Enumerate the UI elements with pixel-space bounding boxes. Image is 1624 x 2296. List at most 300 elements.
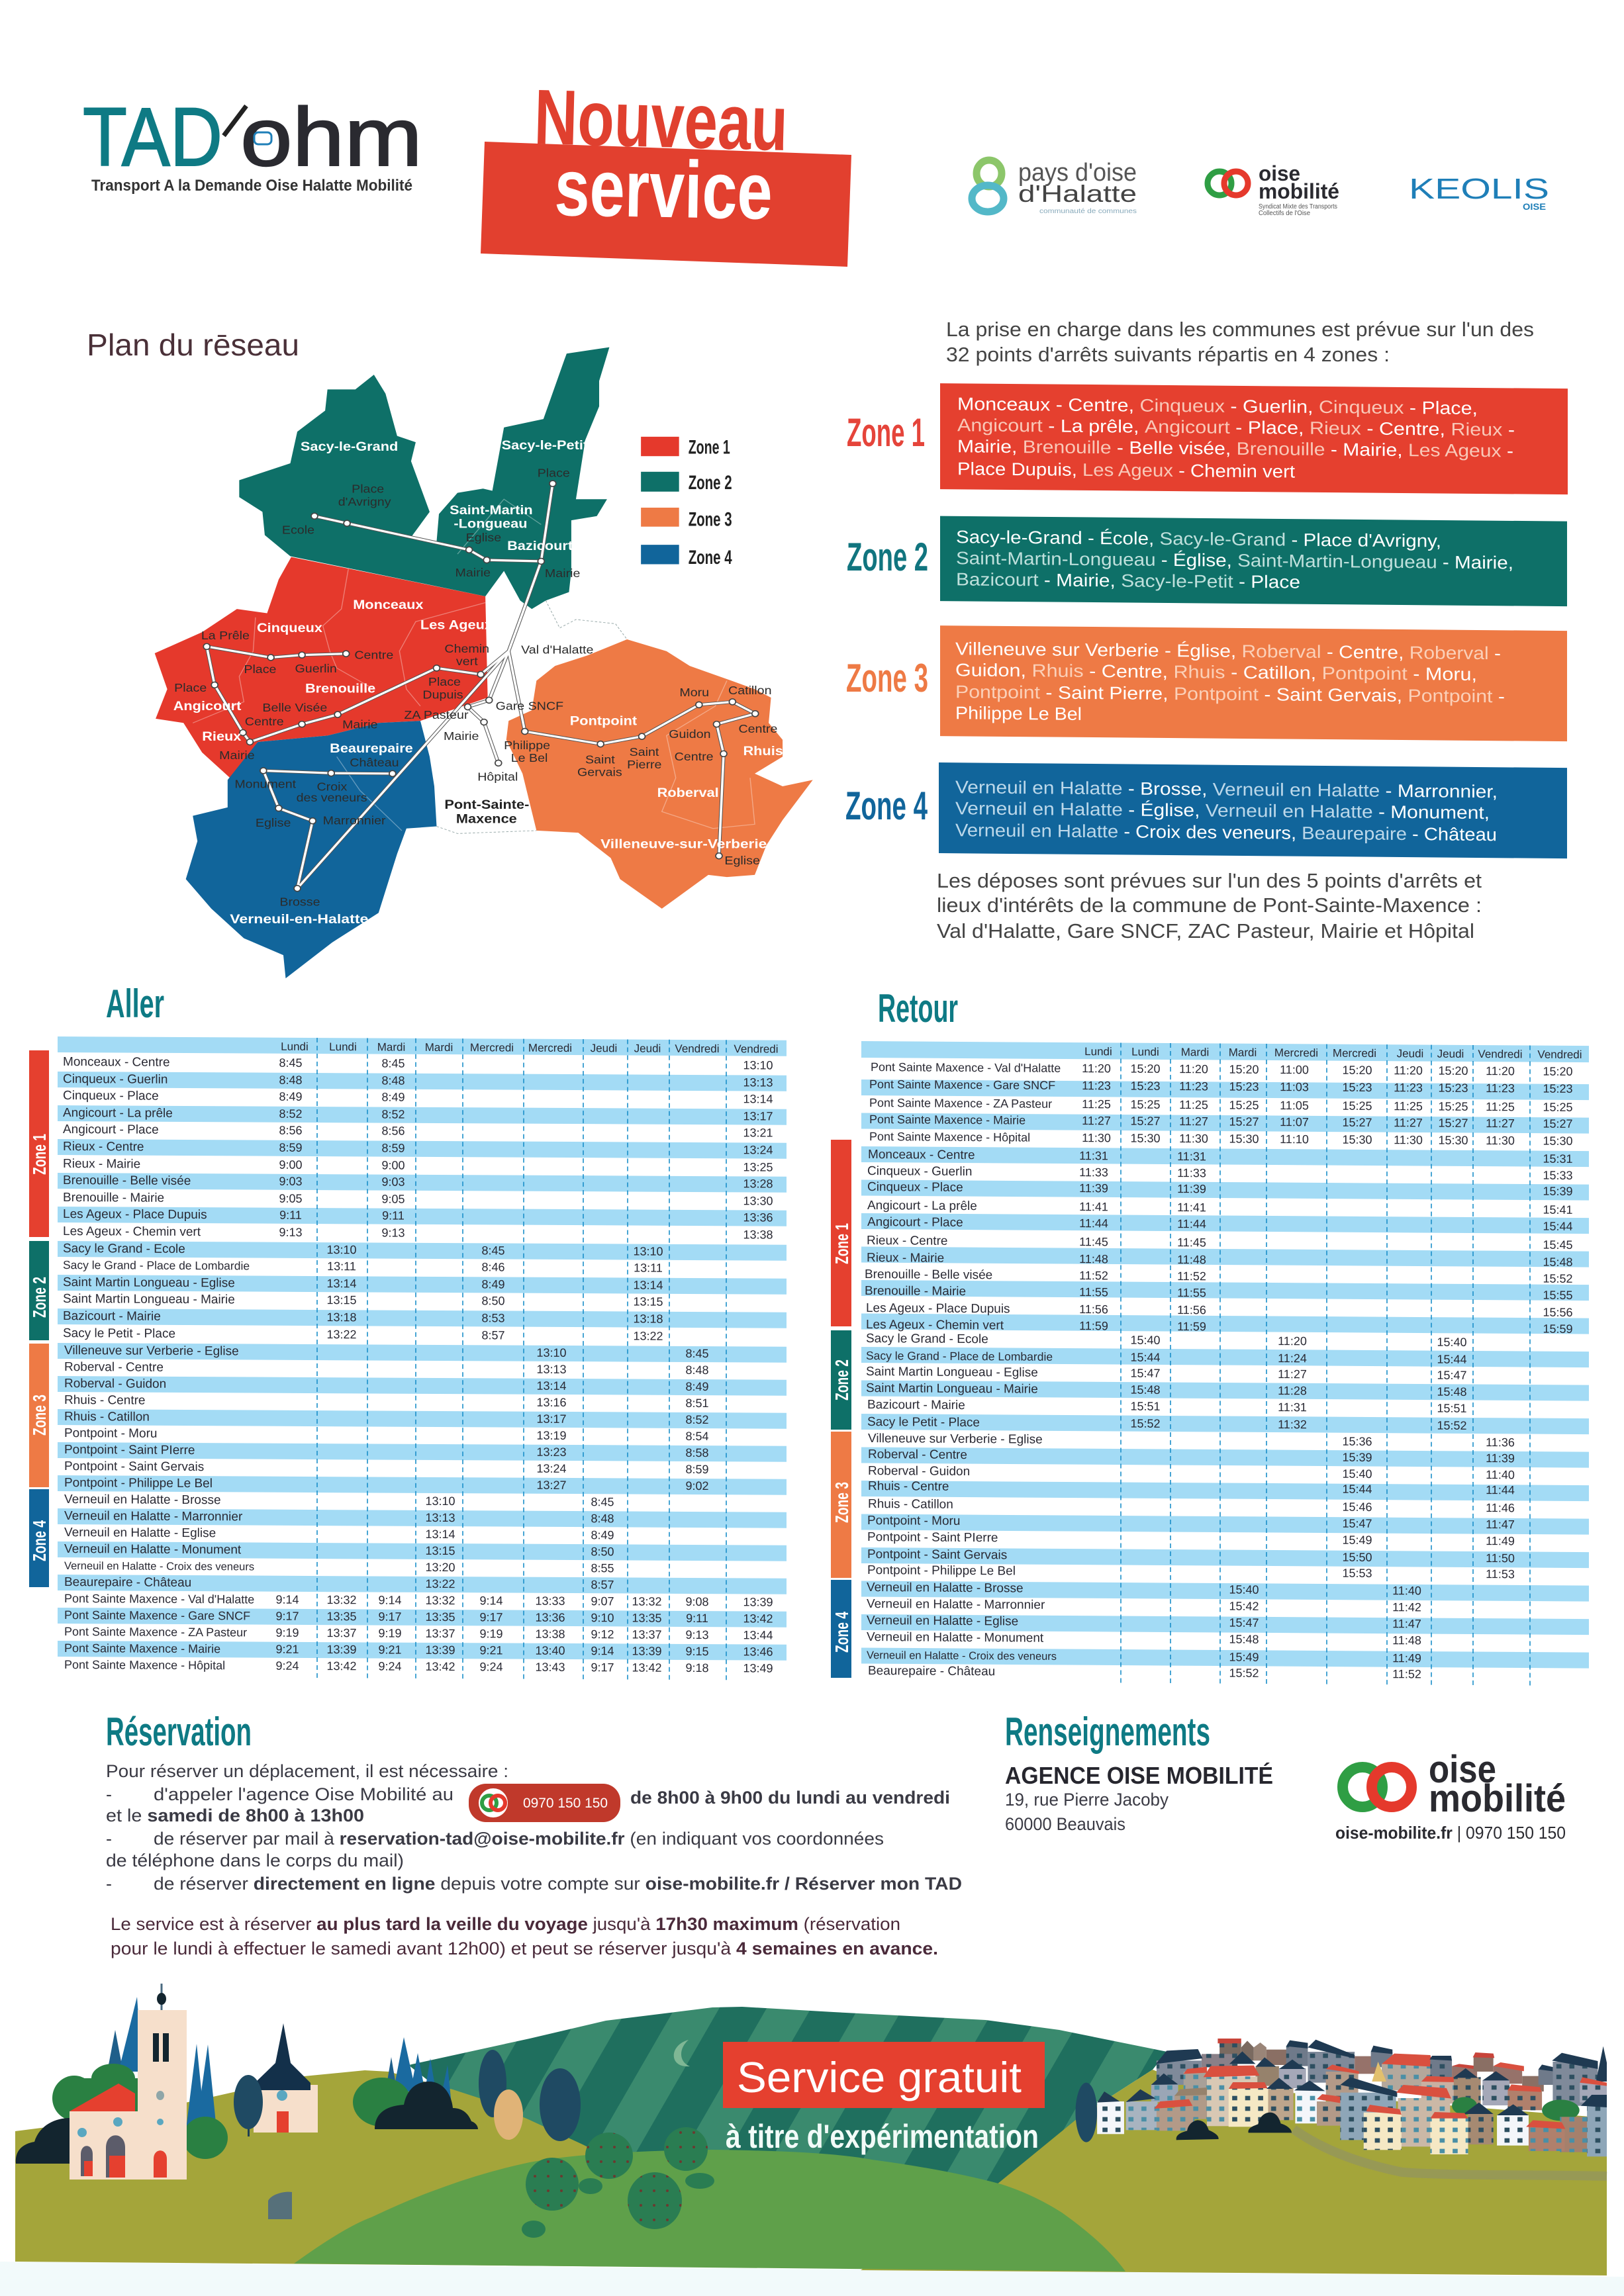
panel: zone 2 stops: Bazicourt - Mairie, Sacy-le-Petit - Place: [956, 569, 1300, 592]
row: Rieux - Centre: 8:59: [279, 1141, 303, 1154]
day headers: [1084, 1045, 1582, 1061]
row: Verneuil en Halatte - Eglise: Verneuil en Halatte - Eglise: [64, 1526, 216, 1540]
row: Pont Sainte Maxence - Gare SNCF: 11:23: [1394, 1081, 1423, 1095]
row: Saint Martin Longueau - Eglise: Saint Martin Longueau - Eglise: [866, 1365, 1038, 1380]
row: Les Ageux - Place Dupuis: 11:56: [1177, 1303, 1206, 1316]
row: Les Ageux - Chemin vert: 11:59: [1177, 1320, 1206, 1333]
day headers: Mercredi: [470, 1041, 514, 1054]
row: Roberval - Guidon: Roberval - Guidon: [868, 1464, 970, 1479]
row: Pont Sainte Maxence - ZA Pasteur: 11:25: [1179, 1098, 1208, 1111]
row: Pontpoint - Philippe Le Bel: Pontpoint - Philippe Le Bel: [867, 1563, 1016, 1579]
row: Angicourt - La prêle: 13:17: [743, 1109, 773, 1123]
panel: zone 3 stops: [940, 625, 1567, 741]
text: agency address: 60000 Beauvais: [1005, 1814, 1125, 1834]
text: agency address: [1005, 1762, 1273, 1834]
row: Pont Sainte Maxence - Val d'Halatte: 13:33: [535, 1594, 565, 1608]
row: Les Ageux - Place Dupuis: 9:11: [382, 1209, 405, 1222]
legend: [641, 436, 732, 568]
row: Angicourt - La prêle: Angicourt - La prêle: [63, 1106, 173, 1121]
row: Pont Sainte Maxence - Hôpital: 11:30: [1486, 1134, 1515, 1147]
row: Pont Sainte Maxence - Gare SNCF: 13:42: [743, 1612, 773, 1626]
back hill with stripes: [408, 2007, 1167, 2197]
row: Pont Sainte Maxence - Val d'Halatte: 15:20: [1130, 1062, 1161, 1076]
row: Verneuil en Halatte - Croix des veneurs: Verneuil en Halatte - Croix des veneurs: [64, 1560, 254, 1573]
row: Roberval - Centre: 13:13: [536, 1363, 567, 1376]
row: Pont Sainte Maxence - Hôpital: 11:30: [1394, 1133, 1423, 1147]
logo: Keolis: [1409, 173, 1549, 212]
row: Saint Martin Longueau - Mairie: 8:50: [481, 1294, 505, 1308]
day headers: Jeudi: [1397, 1047, 1423, 1060]
church and tree cluster: [16, 1984, 228, 2180]
commune names: -Longueau: [454, 516, 527, 531]
row: Sacy le Grand - Place de Lombardie: 13:11: [634, 1262, 663, 1275]
row: Pont Sainte Maxence - Gare SNCF: 9:10: [591, 1611, 614, 1624]
stop names: Gervais: [577, 765, 622, 778]
tagline: Transport A la Demande Oise Halatte Mobilité: [91, 177, 412, 195]
row: Pont Sainte Maxence - Gare SNCF: Pont Sainte Maxence - Gare SNCF: [64, 1608, 250, 1623]
commune names: Brenouille: [305, 681, 375, 696]
row: Villeneuve sur Verberie - Eglise: 15:36: [1342, 1435, 1372, 1448]
row: Verneuil en Halatte - Croix des veneurs: 11:49: [1392, 1651, 1421, 1665]
row: Cinqueux - Guerlin: 11:33: [1079, 1166, 1108, 1179]
row: Pont Sainte Maxence - Mairie: 13:39: [632, 1645, 662, 1658]
day headers: Mercredi: [1274, 1046, 1318, 1059]
row: Sacy le Petit - Place: 15:52: [1130, 1417, 1161, 1430]
row: Saint Martin Longueau - Eglise: Saint Martin Longueau - Eglise: [63, 1275, 235, 1290]
row: Pont Sainte Maxence - Hôpital: 11:30: [1082, 1131, 1111, 1144]
row: Verneuil en Halatte - Marronnier: 8:48: [591, 1512, 614, 1525]
row: Pont Sainte Maxence - Hôpital: 15:30: [1543, 1134, 1573, 1148]
row: Pontpoint - Philippe Le Bel: 15:53: [1342, 1567, 1372, 1580]
row: Pont Sainte Maxence - Val d'Halatte: 11:00: [1280, 1063, 1309, 1076]
row: Pontpoint - Moru: 11:47: [1486, 1518, 1515, 1531]
row: Pontpoint - Saint Gervais: 11:50: [1486, 1551, 1515, 1565]
row: Rieux - Mairie: Rieux - Mairie: [63, 1157, 140, 1171]
row: Verneuil en Halatte - Eglise: 13:14: [425, 1528, 455, 1541]
logo: TAD'ohm: ohm: [240, 91, 422, 183]
zone bars: Retour: [831, 1140, 852, 1678]
row: Saint Martin Longueau - Eglise: 13:14: [633, 1279, 663, 1292]
row: Verneuil en Halatte - Brosse: Verneuil en Halatte - Brosse: [64, 1492, 221, 1507]
stop names: Eglise: [256, 816, 291, 829]
row: Beaurepaire - Château: 8:57: [591, 1578, 614, 1591]
panel: zone 4 stops: Verneuil en Halatte - Église, Verneuil en Halatte - Monument,: [955, 798, 1490, 823]
stop names: Centre: [675, 750, 714, 763]
row: Pontpoint - Saint Pierre: Pontpoint - Saint PIerre: [64, 1443, 195, 1457]
day headers: Lundi: [281, 1040, 309, 1053]
day headers: Vendredi: [675, 1042, 720, 1055]
row: Pontpoint - Moru: 15:47: [1342, 1517, 1372, 1530]
heading: Zone 4: Zone 4: [845, 784, 928, 828]
row: Pont Sainte Maxence - Val d'Halatte: 13:32: [632, 1595, 662, 1608]
row: Pont Sainte Maxence - Gare SNCF: 13:35: [632, 1612, 662, 1625]
row: Pont Sainte Maxence - Hôpital: 15:30: [1130, 1132, 1161, 1145]
stop names: Place: [174, 681, 207, 694]
stop names: Croix: [316, 780, 348, 793]
row: Pont Sainte Maxence - ZA Pasteur: 11:25: [1394, 1099, 1423, 1113]
row: Pont Sainte Maxence - Hôpital: 15:30: [1342, 1133, 1372, 1146]
stop names: Mairie: [342, 717, 378, 731]
zone bars: Aller: Zone 4: [29, 1520, 50, 1561]
row: Brenouille - Mairie: 9:05: [381, 1193, 405, 1206]
text: reservation instructions: Pour réserver un déplacement, il est nécessaire :: [106, 1761, 508, 1781]
road: [1294, 2129, 1607, 2176]
row: Sacy le Petit - Place: 13:22: [633, 1330, 663, 1343]
row: Les Ageux - Place Dupuis: 9:11: [279, 1209, 302, 1222]
bus routes: [207, 484, 755, 888]
row: Pont Sainte Maxence - Val d'Halatte: 11:20: [1486, 1064, 1515, 1078]
day headers: Vendredi: [1478, 1048, 1523, 1060]
logo: pays d'oise et d'Halatte: pays d'oise: [1018, 159, 1137, 187]
row: Verneuil en Halatte - Monument: 15:48: [1229, 1633, 1259, 1646]
stop names: Ecole: [282, 523, 314, 536]
row: Pontpoint - Saint Pierre: 15:49: [1342, 1534, 1372, 1547]
row: Rhuis - Centre: Rhuis - Centre: [64, 1393, 145, 1408]
row: Pont Sainte Maxence - Val d'Halatte: Pont Sainte Maxence - Val d'Halatte: [871, 1060, 1061, 1075]
row: Sacy le Grand - Place de Lombardie: 13:11: [327, 1260, 356, 1273]
row: Saint Martin Longueau - Mairie: 13:15: [633, 1295, 663, 1309]
day headers: Lundi: [1084, 1045, 1112, 1058]
row: Pontpoint - Philippe Le Bel: Pontpoint - Philippe Le Bel: [64, 1476, 213, 1491]
row: Verneuil en Halatte - Eglise: 11:47: [1392, 1617, 1421, 1630]
text: agency address: 19, rue Pierre Jacoby: [1005, 1790, 1169, 1810]
row: Brenouille - Belle visée: Brenouille - Belle visée: [63, 1173, 191, 1188]
row: Pont Sainte Maxence - Mairie: 15:27: [1229, 1115, 1259, 1128]
row: Pontpoint - Saint Pierre: 8:58: [685, 1446, 709, 1459]
row: Pont Sainte Maxence - Val d'Halatte: 9:14: [378, 1594, 402, 1607]
row: Rhuis - Catillon: 11:46: [1486, 1501, 1515, 1514]
row: Rhuis - Catillon: 15:46: [1342, 1500, 1372, 1514]
row: Cinqueux - Guerlin: 8:48: [381, 1074, 405, 1087]
row: Rieux - Mairie: 11:48: [1177, 1253, 1206, 1266]
commune names: Les Ageux: [420, 618, 493, 632]
row: Pont Sainte Maxence - Val d'Halatte: Pont Sainte Maxence - Val d'Halatte: [64, 1592, 254, 1606]
row: Rhuis - Catillon: 8:52: [685, 1413, 709, 1426]
row: Rieux - Mairie: 11:48: [1079, 1252, 1108, 1265]
row: Bazicourt - Mairie: 13:18: [633, 1312, 663, 1326]
row: Les Ageux - Chemin vert: 13:38: [743, 1228, 773, 1242]
row: Verneuil en Halatte - Croix des veneurs: 8:55: [591, 1561, 614, 1575]
row: Les Ageux - Place Dupuis: 13:36: [743, 1211, 773, 1224]
legend: Zone 2: [689, 471, 732, 494]
row: Les Ageux - Place Dupuis: Les Ageux - Place Dupuis: [866, 1301, 1010, 1316]
row: Pont Sainte Maxence - Mairie: 11:27: [1486, 1117, 1515, 1130]
stop names: Mairie: [545, 567, 580, 580]
logo: oise mobilité: Collectifs de l'Oise: [1259, 210, 1310, 217]
title: Nouveau service banner: [481, 73, 851, 267]
row: Monceaux - Centre: 8:45: [279, 1056, 303, 1070]
row: Pont Sainte Maxence - Mairie: 13:40: [535, 1644, 565, 1657]
row bands: [58, 1036, 787, 1661]
legend: Zone 1: [689, 436, 730, 458]
row: Pont Sainte Maxence - ZA Pasteur: 13:37: [425, 1627, 455, 1640]
day headers: Lundi: [1131, 1046, 1159, 1058]
row: Pontpoint - Saint Gervais: 15:50: [1342, 1551, 1372, 1564]
day headers: Vendredi: [734, 1042, 779, 1056]
zone bars: Retour: Zone 1: [832, 1223, 852, 1264]
row: Angicourt - La prêle: 8:52: [381, 1108, 405, 1121]
row: Pont Sainte Maxence - ZA Pasteur: 15:25: [1229, 1099, 1259, 1112]
text: reservation instructions: -: [106, 1784, 112, 1804]
row: Cinqueux - Guerlin: 11:33: [1177, 1166, 1206, 1179]
row: Pont Sainte Maxence - ZA Pasteur: 11:25: [1082, 1097, 1111, 1111]
row: Roberval - Guidon: 11:40: [1486, 1468, 1515, 1481]
text: reservation instructions: de réserver directement en ligne depuis votre compte sur oise-mobilite.fr / Réserver mon TAD: [154, 1874, 962, 1894]
text: booking deadline: [111, 1914, 938, 1958]
heading: Zone 3: Zone 3: [846, 656, 928, 700]
row: Verneuil en Halatte - Brosse: 13:10: [425, 1494, 455, 1508]
logo: pays d'oise et d'Halatte: communauté de communes: [1039, 208, 1137, 215]
route stops: [203, 481, 759, 892]
row: Angicourt - Place: Angicourt - Place: [63, 1123, 159, 1137]
row: Pont Sainte Maxence - Gare SNCF: 9:17: [378, 1610, 402, 1624]
row: Les Ageux - Place Dupuis: 15:56: [1543, 1306, 1573, 1319]
phone pill: 0970 150 150: [523, 1796, 608, 1811]
row: Pont Sainte Maxence - Gare SNCF: 9:11: [686, 1612, 708, 1625]
stop names: Place: [244, 663, 276, 676]
row: Pont Sainte Maxence - Val d'Halatte: 9:14: [275, 1593, 299, 1606]
row: Angicourt - La prêle: 15:41: [1543, 1203, 1573, 1217]
text: agency address: AGENCE OISE MOBILITÉ: [1005, 1762, 1273, 1789]
row: Sacy le Petit - Place: 13:22: [326, 1328, 357, 1341]
row: Pont Sainte Maxence - Mairie: Pont Sainte Maxence - Mairie: [64, 1641, 220, 1655]
stop names: Val d'Halatte: [521, 643, 593, 656]
row: Rhuis - Centre: 8:51: [685, 1397, 709, 1410]
row: Angicourt - La prêle: 11:41: [1177, 1201, 1206, 1214]
row: Pont Sainte Maxence - Val d'Halatte: 9:07: [591, 1594, 614, 1608]
row: Roberval - Guidon: 13:14: [536, 1379, 567, 1393]
experimental trial caption: à titre d'expérimentation: [726, 2118, 1039, 2155]
zone bars: Aller: Zone 3: [29, 1395, 50, 1436]
row: Brenouille - Belle visée: Brenouille - Belle visée: [865, 1267, 992, 1282]
commune names: Rhuis: [743, 744, 783, 758]
text: reservation instructions: et le samedi de 8h00 à 13h00: [106, 1806, 364, 1825]
middle row houses: [1184, 2051, 1607, 2110]
text: booking deadline: pour le lundi à effectuer le samedi avant 12h00) et peut se réserver jusqu'à 4 semaines en avance.: [111, 1939, 938, 1958]
row: Pont Sainte Maxence - Mairie: 11:27: [1394, 1116, 1423, 1130]
row: Angicourt - La prêle: 11:41: [1079, 1200, 1108, 1213]
logo: pays d'oise et d'Halatte: d'Halatte: [1018, 180, 1137, 207]
row: Rieux - Mairie: 9:00: [381, 1159, 405, 1172]
row: Pont Sainte Maxence - ZA Pasteur: 13:44: [743, 1628, 773, 1642]
row: Beaurepaire - Château: Beaurepaire - Château: [868, 1664, 995, 1678]
stop names: Centre: [245, 715, 284, 728]
row: Verneuil en Halatte - Monument: Verneuil en Halatte - Monument: [64, 1542, 242, 1557]
row: Pont Sainte Maxence - Gare SNCF: 15:23: [1130, 1079, 1161, 1093]
day headers: Vendredi: [1537, 1048, 1582, 1061]
stop names: Le Bel: [511, 751, 548, 764]
text: reservation instructions: de téléphone dans le corps du mail): [106, 1851, 404, 1870]
row: Pont Sainte Maxence - ZA Pasteur: 9:13: [685, 1628, 709, 1641]
row: Verneuil en Halatte - Monument: 13:15: [425, 1544, 455, 1557]
commune names: Pont-Sainte-: [444, 798, 529, 812]
row: Cinqueux - Place: 11:39: [1177, 1182, 1206, 1195]
row: Brenouille - Belle visée: 13:28: [743, 1177, 773, 1191]
front green hill: [294, 2150, 1125, 2272]
row: Pont Sainte Maxence - ZA Pasteur: 9:12: [591, 1628, 614, 1641]
row: Rhuis - Centre: Rhuis - Centre: [868, 1479, 949, 1494]
logo: pays d'oise et d'Halatte: [972, 159, 1137, 215]
row: Beaurepaire - Château: Beaurepaire - Château: [64, 1575, 191, 1590]
table: Retour timetable: [861, 1041, 1589, 1689]
row: Rieux - Mairie: 9:00: [279, 1158, 303, 1171]
row: Verneuil en Halatte - Brosse: 15:40: [1229, 1583, 1259, 1596]
stop names: Gare SNCF: [496, 699, 563, 712]
commune names: Sacy-le-Petit: [502, 438, 588, 453]
row: Bazicourt - Mairie: 11:31: [1278, 1401, 1307, 1414]
row: Pont Sainte Maxence - Gare SNCF: 13:35: [425, 1610, 455, 1624]
row: Sacy le Petit - Place: Sacy le Petit - Place: [867, 1415, 980, 1430]
row: Pont Sainte Maxence - Mairie: 11:27: [1082, 1114, 1111, 1127]
zone bars: Retour: Zone 2: [832, 1359, 852, 1401]
panel: zone 4 stops: Verneuil en Halatte - Croix des veneurs, Beaurepaire - Château: [955, 820, 1497, 845]
row: Cinqueux - Place: 8:49: [381, 1091, 405, 1104]
row: Rieux - Centre: 11:45: [1177, 1236, 1206, 1249]
row: Pont Sainte Maxence - Val d'Halatte: 15:20: [1229, 1063, 1259, 1076]
row: Verneuil en Halatte - Eglise: 15:47: [1229, 1616, 1259, 1630]
row: Angicourt - Place: 11:44: [1079, 1217, 1108, 1230]
row: Rieux - Centre: 13:24: [743, 1143, 773, 1157]
stop names: Saint: [585, 753, 616, 766]
row: Pont Sainte Maxence - Val d'Halatte: 13:39: [743, 1595, 773, 1609]
logo: oise mobilité: Syndicat Mixte des Transports: [1259, 203, 1337, 210]
commune names: Beaurepaire: [330, 741, 413, 756]
panel: zone 4 stops: [939, 762, 1567, 858]
row: Les Ageux - Place Dupuis: 11:56: [1079, 1303, 1108, 1316]
row: Sacy le Grand - Place de Lombardie: 8:46: [481, 1260, 505, 1274]
stop names: Philippe: [504, 739, 550, 752]
row: Saint Martin Longueau - Mairie: Saint Martin Longueau - Mairie: [866, 1381, 1038, 1397]
stop names: Mairie: [444, 729, 479, 743]
row: Pont Sainte Maxence - Hôpital: 15:30: [1229, 1132, 1259, 1146]
heading: Aller: Aller: [106, 982, 164, 1026]
row: Saint Martin Longueau - Mairie: Saint Martin Longueau - Mairie: [63, 1292, 235, 1307]
row: Pont Sainte Maxence - Mairie: 9:14: [591, 1644, 614, 1657]
row: Cinqueux - Place: 13:14: [743, 1092, 773, 1106]
row: Beaurepaire - Château: 11:52: [1392, 1667, 1421, 1680]
row: Pont Sainte Maxence - Gare SNCF: 15:23: [1229, 1080, 1259, 1093]
row: Pont Sainte Maxence - Val d'Halatte: 9:08: [685, 1595, 709, 1608]
row: Sacy le Grand - Ecole: 8:45: [481, 1244, 505, 1258]
row: Pont Sainte Maxence - ZA Pasteur: Pont Sainte Maxence - ZA Pasteur: [869, 1096, 1052, 1111]
front row houses: [1097, 2066, 1607, 2156]
stop names: Pierre: [627, 758, 661, 771]
zone 1 territory: [155, 557, 488, 780]
row: Pont Sainte Maxence - Gare SNCF: Pont Sainte Maxence - Gare SNCF: [869, 1078, 1055, 1092]
row: Pont Sainte Maxence - Mairie: 15:27: [1342, 1116, 1372, 1129]
row: Pont Sainte Maxence - Mairie: 15:27: [1543, 1117, 1573, 1130]
row: Les Ageux - Chemin vert: Les Ageux - Chemin vert: [866, 1318, 1004, 1332]
row: Pontpoint - Moru: 13:19: [536, 1429, 567, 1442]
text: drop-off points: [937, 869, 1482, 942]
panel: zone 2 stops: Saint-Martin-Longueau - Église, Saint-Martin-Longueau - Mairie,: [956, 548, 1513, 573]
row: Angicourt - Place: Angicourt - Place: [867, 1215, 963, 1230]
bushes and cypress trees: [268, 2037, 581, 2219]
row: Villeneuve sur Verberie - Eglise: Villeneuve sur Verberie - Eglise: [868, 1432, 1043, 1447]
row: Brenouille - Mairie: Brenouille - Mairie: [865, 1284, 966, 1299]
row: Pont Sainte Maxence - Mairie: 9:15: [685, 1645, 709, 1658]
panel: zone 3 stops: Pontpoint - Saint Pierre, Pontpoint - Saint Gervais, Pontpoint -: [955, 682, 1505, 706]
row: Bazicourt - Mairie: 8:53: [481, 1311, 505, 1325]
free service banner: [723, 2042, 1045, 2108]
row: Verneuil en Halatte - Marronnier: 15:42: [1229, 1600, 1259, 1613]
stop names: Chemin: [444, 642, 489, 655]
row: Les Ageux - Place Dupuis: Les Ageux - Place Dupuis: [63, 1207, 207, 1222]
row: Pontpoint - Saint Pierre: Pontpoint - Saint PIerre: [867, 1530, 998, 1545]
stop names: Saint: [630, 745, 659, 758]
zone 3 territory: [506, 639, 813, 909]
row: Cinqueux - Place: Cinqueux - Place: [63, 1089, 159, 1103]
row: Bazicourt - Mairie: Bazicourt - Mairie: [63, 1309, 161, 1324]
free service banner: Service gratuit: [737, 2053, 1022, 2101]
row: Pont Sainte Maxence - Mairie: 9:21: [479, 1643, 503, 1657]
stop names: Eglise: [466, 531, 501, 544]
row: Pont Sainte Maxence - Hôpital: 13:49: [743, 1661, 773, 1675]
heading: Zone 2: Zone 2: [847, 535, 928, 579]
orchard trees: [522, 2127, 714, 2238]
commune names: Angicourt: [173, 699, 241, 713]
row: Cinqueux - Place: Cinqueux - Place: [867, 1180, 963, 1195]
row: Saint Martin Longueau - Eglise: 15:47: [1437, 1369, 1467, 1382]
intro text: zones: 32 points d'arrêts suivants répartis en 4 zones :: [946, 343, 1390, 366]
row: Rieux - Mairie: 15:48: [1543, 1256, 1573, 1269]
row: Pont Sainte Maxence - Hôpital: 13:42: [632, 1661, 662, 1675]
row: Pont Sainte Maxence - Val d'Halatte: 11:20: [1082, 1062, 1111, 1075]
row: Cinqueux - Place: 11:39: [1079, 1181, 1108, 1195]
row: Brenouille - Mairie: Brenouille - Mairie: [63, 1191, 164, 1205]
row: Pont Sainte Maxence - Mairie: 13:39: [326, 1643, 357, 1656]
row: Brenouille - Belle visée: 11:52: [1177, 1269, 1206, 1283]
stop names: Belle Visée: [262, 701, 327, 714]
logo: TAD'ohm: TAD: [83, 91, 222, 183]
row: Cinqueux - Guerlin: 13:13: [743, 1076, 773, 1089]
row: Sacy le Grand - Ecole: 13:10: [633, 1245, 663, 1258]
row: Pont Sainte Maxence - Val d'Halatte: 15:20: [1543, 1065, 1573, 1078]
row: Brenouille - Mairie: 13:30: [743, 1194, 773, 1208]
row: Cinqueux - Place: 15:39: [1543, 1185, 1573, 1198]
row: Pont Sainte Maxence - ZA Pasteur: 9:19: [275, 1626, 299, 1639]
row: Pont Sainte Maxence - ZA Pasteur: 15:25: [1438, 1100, 1468, 1113]
stop names: Monument: [234, 777, 297, 790]
commune names: Sacy-le-Grand: [301, 439, 398, 454]
column separators: [1121, 1043, 1530, 1689]
row: Pont Sainte Maxence - Mairie: 15:27: [1438, 1117, 1468, 1130]
row: Bazicourt - Mairie: 15:51: [1130, 1400, 1161, 1413]
panel: zone 1 stops: Monceaux - Centre, Cinqueux - Guerlin, Cinqueux - Place,: [957, 394, 1478, 418]
logo: Keolis: OISE: [1523, 201, 1546, 212]
phone pill: [469, 1784, 620, 1822]
row: Pont Sainte Maxence - Hôpital: 11:30: [1179, 1132, 1208, 1145]
logo: Keolis: KEOLIS: [1409, 173, 1549, 205]
panel: zone 1 stops: Mairie, Brenouille - Belle visée, Brenouille - Mairie, Les Ageux -: [957, 436, 1513, 461]
stop names: Place: [428, 675, 461, 688]
day headers: [281, 1040, 779, 1056]
row: Rhuis - Centre: 13:16: [536, 1396, 567, 1409]
row: Pont Sainte Maxence - Mairie: 11:07: [1280, 1115, 1309, 1128]
panel: zone 3 stops: Guidon, Rhuis - Centre, Rhuis - Catillon, Pontpoint - Moru,: [955, 660, 1477, 684]
row: Les Ageux - Chemin vert: 9:13: [381, 1226, 405, 1240]
commune names: Saint-Martin: [450, 503, 533, 518]
row: Pont Sainte Maxence - Mairie: 11:27: [1179, 1115, 1208, 1128]
stop names: Place: [538, 466, 570, 479]
row: Pontpoint - Moru: Pontpoint - Moru: [64, 1426, 157, 1441]
zone 2 territory: [239, 347, 609, 609]
row: Rhuis - Catillon: Rhuis - Catillon: [64, 1410, 150, 1424]
row: Villeneuve sur Verberie - Eglise: 13:10: [536, 1346, 567, 1359]
panel: zone 3 stops: Philippe Le Bel: [955, 703, 1082, 724]
row: Sacy le Grand - Place de Lombardie: 11:24: [1278, 1352, 1307, 1365]
stop names: [174, 466, 777, 908]
